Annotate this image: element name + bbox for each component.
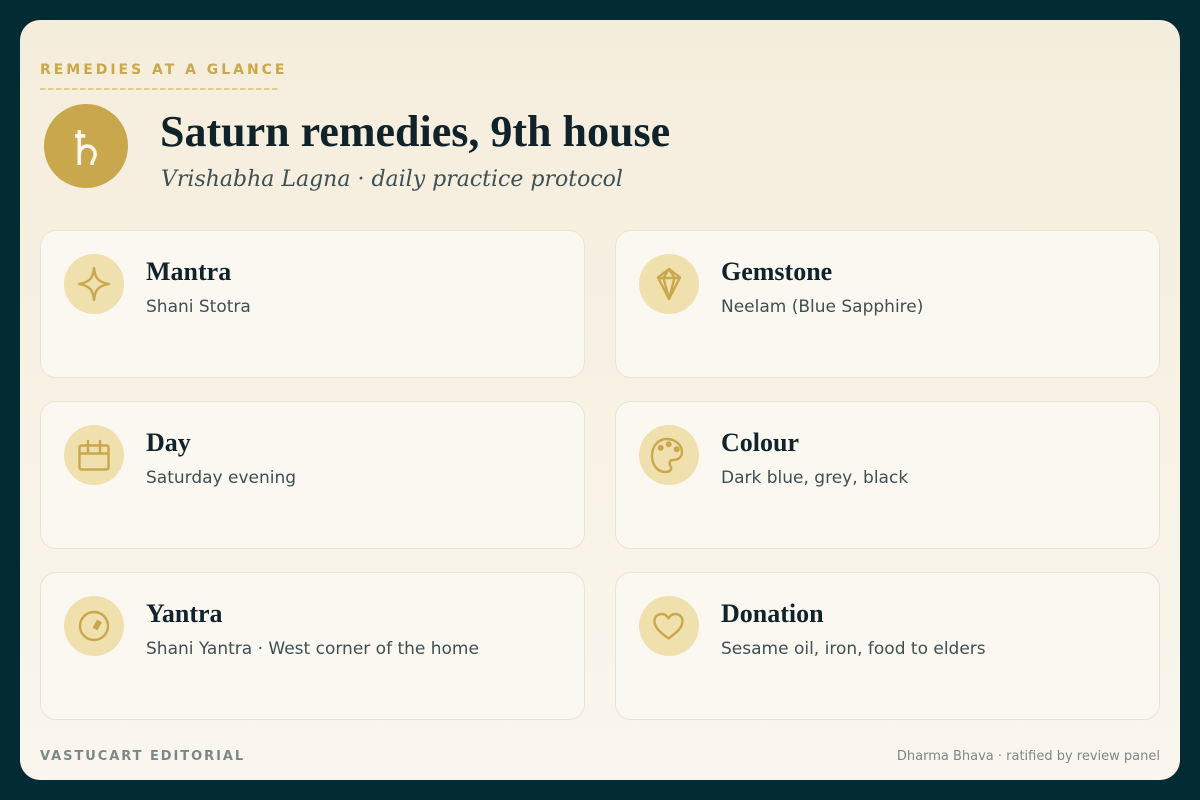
panel: Yantra <box>40 572 585 720</box>
text: Day detail: Saturday evening <box>146 468 296 488</box>
footer: credit: Dharma Bhava · ratified by review panel <box>897 749 1160 764</box>
text: Yantra detail: Shani Yantra · West corner of the home <box>146 639 479 659</box>
icon: Saturn medallion: ♄ <box>64 121 108 177</box>
text: Gemstone detail: Neelam (Blue Sapphire) <box>721 297 923 317</box>
icon: compass <box>64 596 124 656</box>
title: Saturn remedies, 9th house <box>160 107 670 156</box>
subtitle: Vrishabha Lagna · daily practice protocol <box>161 167 623 192</box>
kicker dashed rule <box>40 88 278 90</box>
text: Donation detail: Sesame oil, iron, food to elders <box>721 639 986 659</box>
heading: Yantra: Yantra <box>146 599 223 628</box>
icon: heart <box>639 596 699 656</box>
kicker label: REMEDIES AT A GLANCE <box>40 62 287 78</box>
text: Mantra detail: Shani Stotra <box>146 297 251 317</box>
heading: Colour: Colour <box>721 428 799 457</box>
icon: calendar <box>64 425 124 485</box>
heading: Day: Day <box>146 428 191 457</box>
icon: gem <box>639 254 699 314</box>
heading: Donation: Donation <box>721 599 824 628</box>
icon: palette <box>639 425 699 485</box>
heading: Gemstone: Gemstone <box>721 257 832 286</box>
text: Colour detail: Dark blue, grey, black <box>721 468 908 488</box>
icon: sparkle <box>64 254 124 314</box>
icon: Saturn medallion <box>44 104 128 188</box>
panel: Gemstone <box>615 230 1160 378</box>
footer: brand: VASTUCART EDITORIAL <box>40 749 245 764</box>
panel: Colour <box>615 401 1160 549</box>
panel: Donation <box>615 572 1160 720</box>
panel: Mantra <box>40 230 585 378</box>
panel: Day <box>40 401 585 549</box>
heading: Mantra: Mantra <box>146 257 231 286</box>
